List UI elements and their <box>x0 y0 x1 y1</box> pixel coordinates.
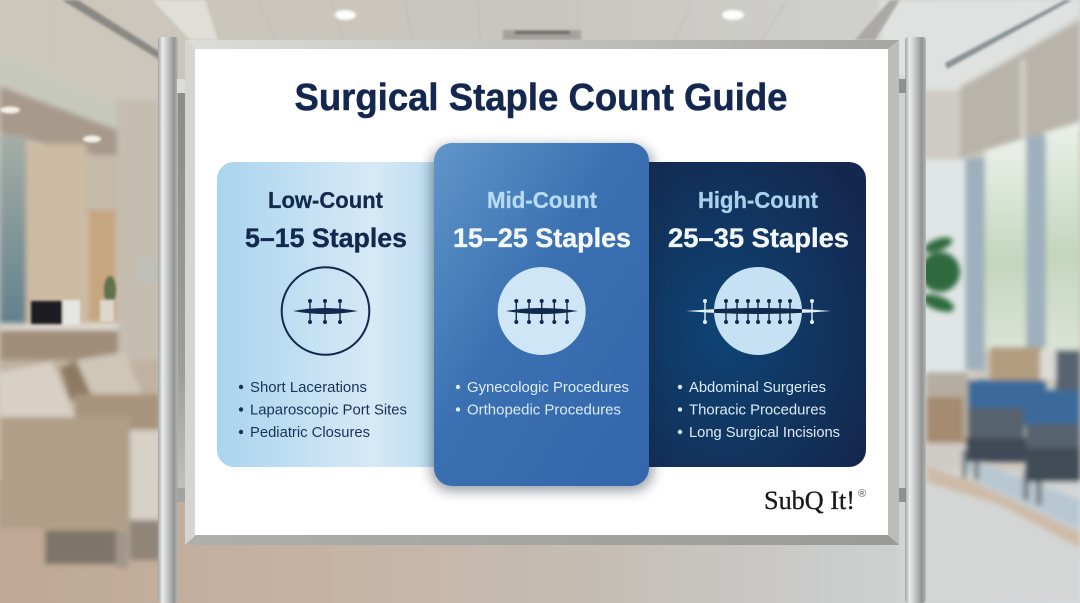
sign board <box>195 49 888 535</box>
list: high-count uses: Long Surgical Incisions <box>689 425 840 441</box>
heading: low-count: Low-Count <box>268 187 383 213</box>
list: high-count uses <box>678 380 840 441</box>
ceiling details <box>62 0 160 60</box>
list: mid-count uses: Gynecologic Procedures <box>467 380 629 396</box>
heading: mid-count: Mid-Count <box>487 187 597 213</box>
icon: long incision extending beyond circle <box>686 267 831 355</box>
list: high-count uses: Abdominal Surgeries <box>689 380 826 396</box>
panel: high-count <box>630 162 866 467</box>
list: high-count uses: Thoracic Procedures <box>689 402 826 418</box>
logo: SubQ It!: ® <box>858 488 866 500</box>
panel: mid-count <box>434 143 649 486</box>
panel: low-count <box>217 162 457 467</box>
post: right <box>905 37 926 603</box>
right room <box>880 0 1080 95</box>
list: mid-count uses <box>456 380 629 418</box>
logo: SubQ It!: SubQ It! <box>764 486 855 515</box>
staple range: low: 5–15 Staples <box>245 223 407 253</box>
rear rails between posts and sign <box>177 92 907 488</box>
icon: medium incision with five staples <box>498 267 586 355</box>
desk items <box>31 301 62 324</box>
title: Surgical Staple Count Guide <box>294 77 788 119</box>
card shadow <box>431 146 653 491</box>
post: left <box>158 37 178 603</box>
staple range: high: 25–35 Staples <box>668 223 849 253</box>
list: low-count uses: Short Lacerations <box>250 380 367 396</box>
list: mid-count uses: Orthopedic Procedures <box>467 402 621 418</box>
list: low-count uses: Laparoscopic Port Sites <box>250 402 407 418</box>
sign frame <box>185 40 899 545</box>
brackets: connector clamps <box>177 79 906 502</box>
left room <box>0 50 160 170</box>
list: low-count uses: Pediatric Closures <box>250 425 370 441</box>
plant <box>896 224 960 320</box>
heading: high-count: High-Count <box>698 187 818 213</box>
icon: short incision with three staples <box>282 267 369 355</box>
staple range: mid: 15–25 Staples <box>453 223 631 253</box>
list: low-count uses <box>239 380 407 441</box>
